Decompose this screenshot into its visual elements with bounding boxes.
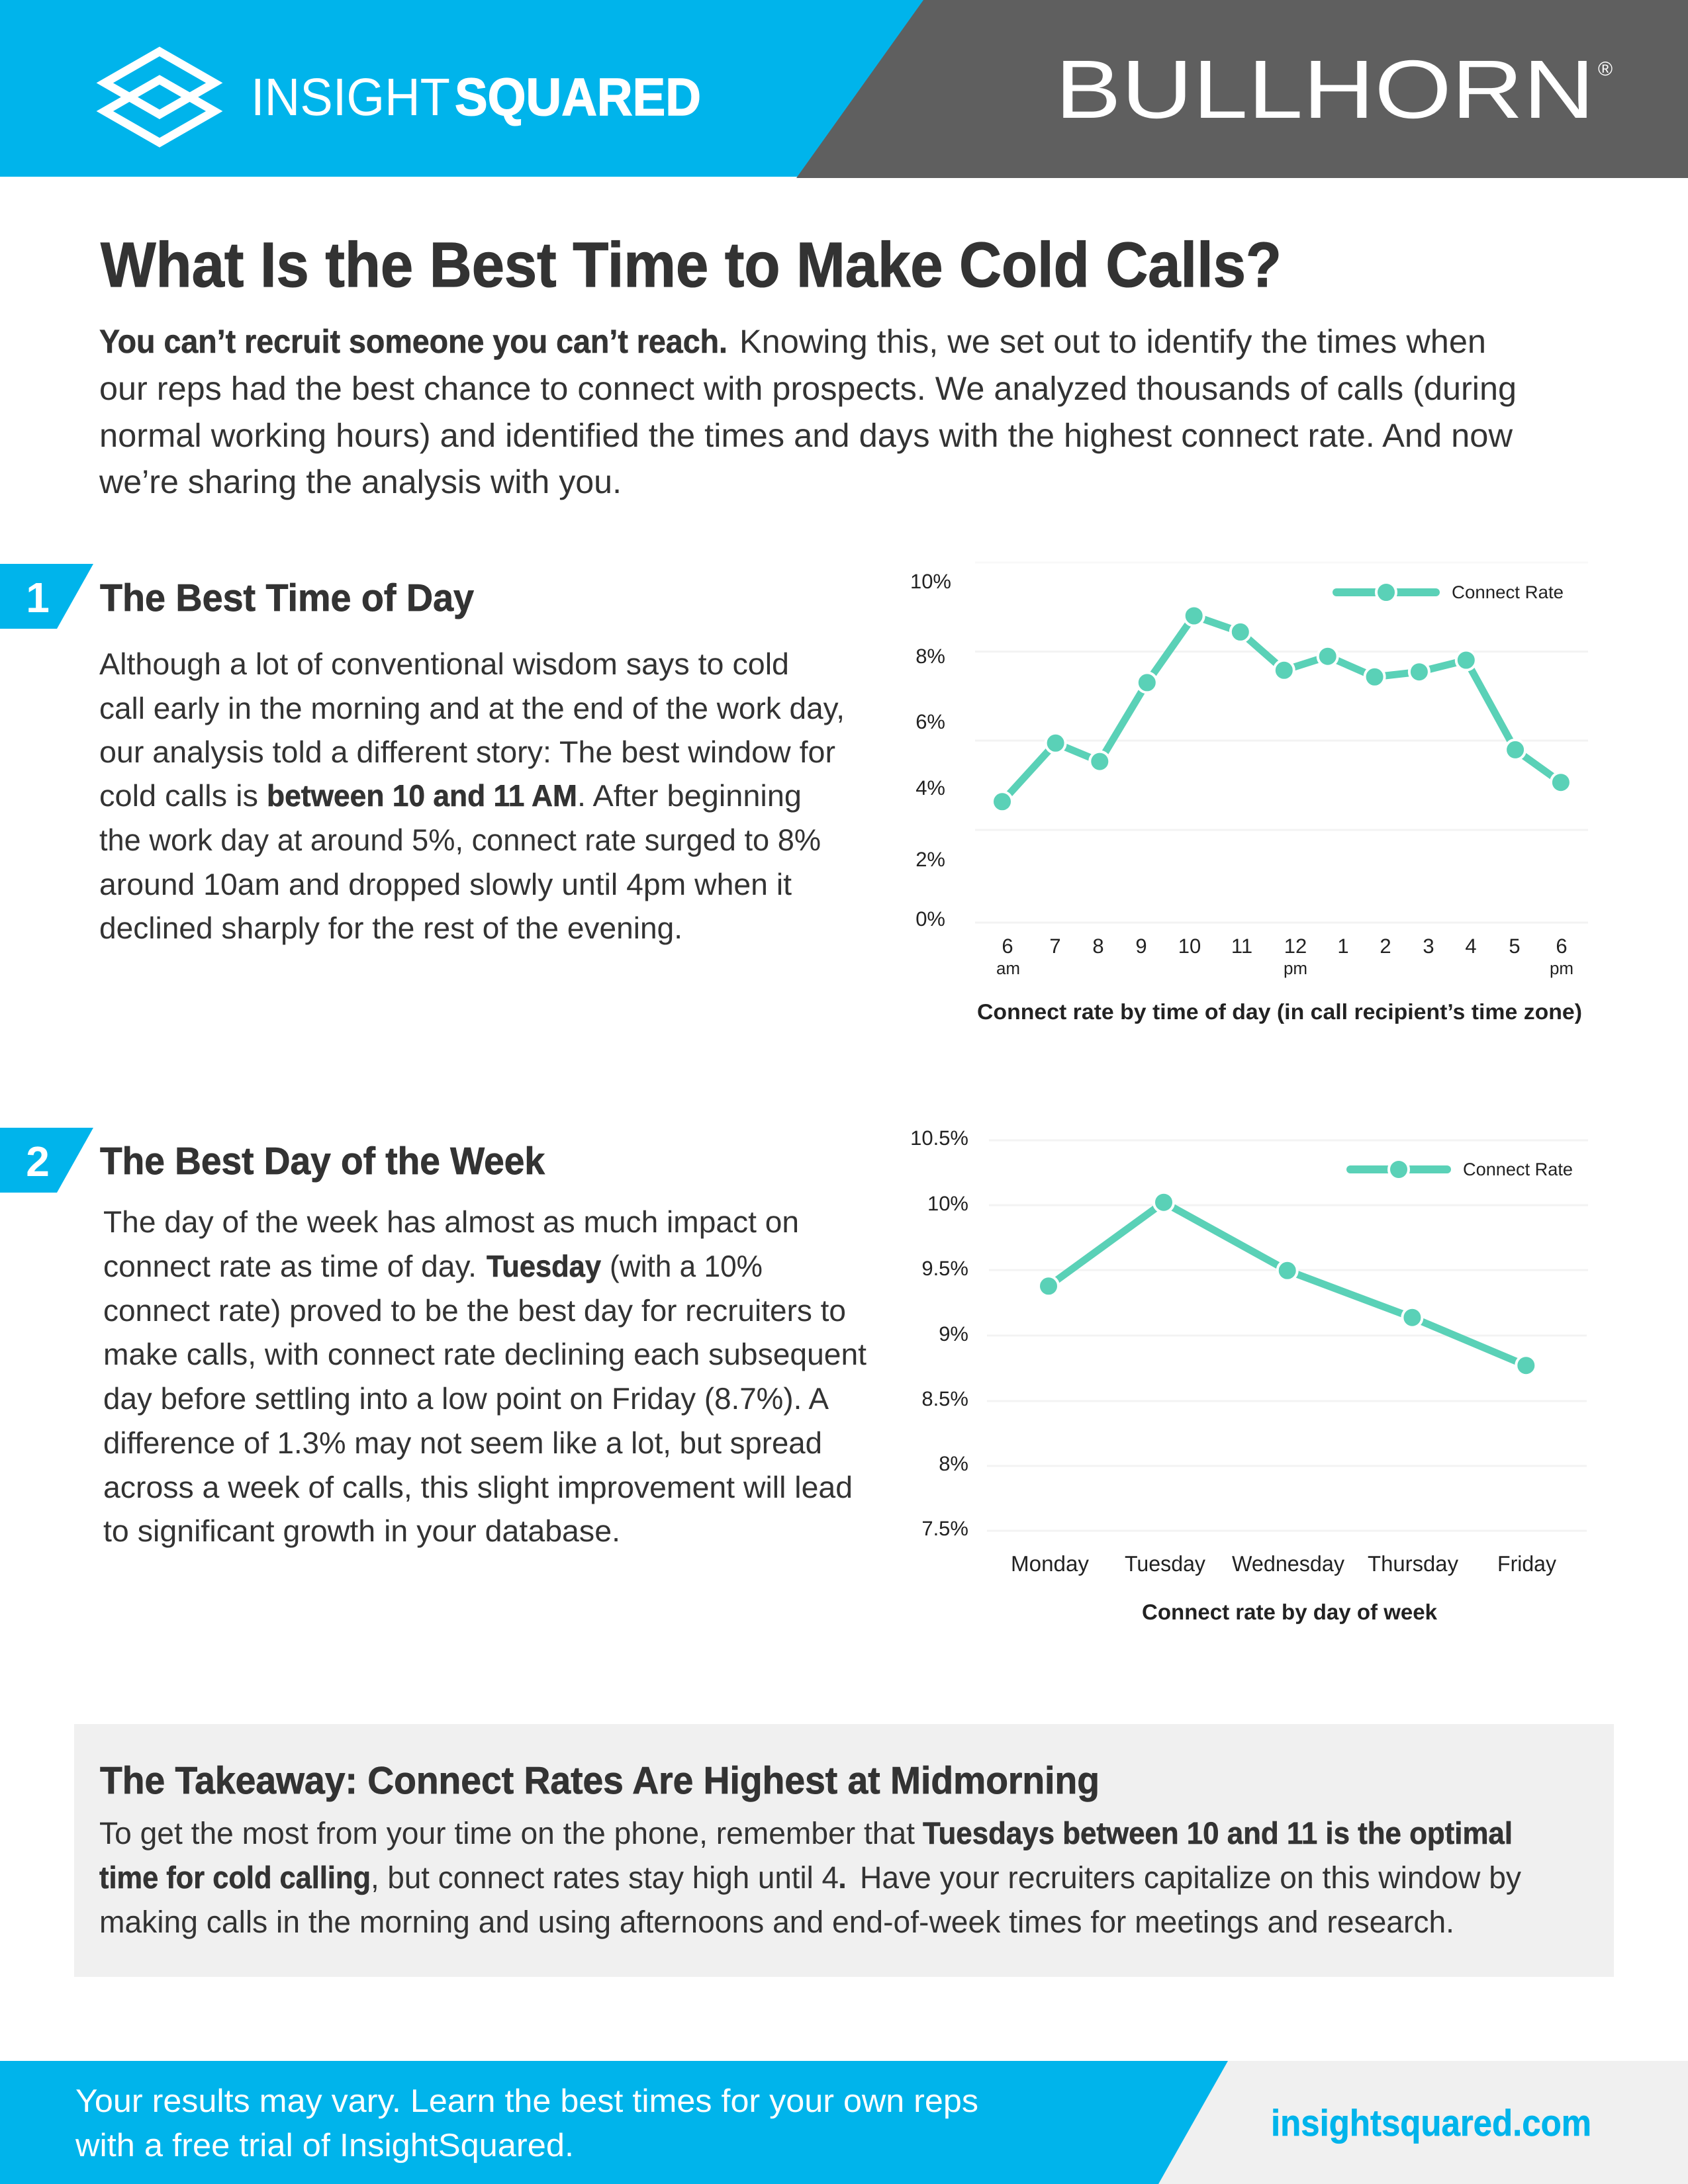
number badge 2 [0, 1128, 93, 1193]
body text: day of week: make calls, with connect rate declining each subsequent [103, 1337, 867, 1371]
heading: the best day of the week: The Best Day of the Week [100, 1140, 545, 1183]
body text: day of week: day before settling into a low point on Friday (8.7%). A [103, 1381, 829, 1416]
body text: time of day: cold calls is [99, 778, 258, 813]
x axis labels: 6 [1002, 934, 1013, 958]
chart caption: Connect rate by time of day (in call recipient’s time zone) [977, 999, 1582, 1024]
x axis labels: 7 [1049, 934, 1061, 958]
body text: day of week: connect rate as time of day. [103, 1249, 477, 1283]
y axis labels: 2% [915, 848, 945, 871]
y axis labels: 10% [927, 1192, 968, 1215]
body text: time of day: around 10am and dropped slowly until 4pm when it [99, 867, 792, 901]
line chart: connect rate by time of day [910, 563, 1588, 1024]
line chart: connect rate by day of week [910, 1126, 1588, 1624]
panel: takeaway [74, 1724, 1614, 1977]
x axis labels: pm [1550, 958, 1573, 978]
footer message [75, 2083, 978, 2163]
y axis labels: 8.5% [921, 1387, 968, 1410]
body text: time of day: Although a lot of conventional wisdom says to cold [99, 647, 789, 681]
intro text block: we’re sharing the analysis with you. [99, 463, 622, 500]
heading: takeaway: The Takeaway: Connect Rates Are Highest at Midmorning [100, 1759, 1100, 1802]
x axis labels [996, 934, 1573, 978]
x axis labels: 9 [1135, 934, 1147, 958]
Bullhorn wordmark: ® [1598, 58, 1613, 80]
body text: day of week: difference of 1.3% may not seem like a lot, but spread [103, 1426, 822, 1460]
data line [1049, 1203, 1526, 1365]
body text: day of week: Tuesday [487, 1249, 601, 1283]
takeaway body text: time for cold calling [99, 1860, 371, 1895]
y axis labels: 8% [939, 1452, 968, 1475]
legend [1336, 582, 1564, 602]
title: What Is the Best Time to Make Cold Calls? [101, 230, 1282, 300]
y axis labels: 10% [910, 570, 951, 593]
takeaway body text: Tuesdays between 10 and 11 is the optimal [923, 1815, 1513, 1850]
data points [992, 606, 1571, 811]
body text: day of week: (with a 10% [610, 1249, 763, 1283]
panel: best time of day [0, 563, 1588, 1024]
heading: the best time of day: The Best Time of Day [100, 576, 474, 619]
takeaway body text [99, 1815, 1521, 1939]
chart caption: Connect rate by day of week [1142, 1600, 1438, 1624]
intro text block: normal working hours) and identified the times and days with the highest connect rate. And now [99, 417, 1513, 454]
footer gray background [1125, 2061, 1688, 2184]
body text: day of week: connect rate) proved to be the best day for recruiters to [103, 1293, 846, 1328]
x axis labels: 12 [1284, 934, 1307, 958]
intro text block: Knowing this, we set out to identify the times when [739, 323, 1486, 360]
takeaway background [74, 1724, 1614, 1977]
body text: time of day: . After beginning [577, 778, 802, 813]
y axis labels: 7.5% [921, 1517, 968, 1540]
header background: blue [0, 0, 927, 177]
takeaway body text: , but connect rates stay high until 4 [371, 1860, 839, 1895]
x axis labels: pm [1284, 958, 1307, 978]
body text: time of day: the work day at around 5%, connect rate surged to 8% [99, 823, 821, 857]
footer message: with a free trial of InsightSquared. [75, 2128, 574, 2163]
InsightSquared wordmark: SQUARED [455, 68, 701, 126]
header band [0, 0, 1688, 178]
y axis labels: 6% [915, 710, 945, 733]
x axis labels: 2 [1380, 934, 1391, 958]
x axis labels: 11 [1231, 934, 1252, 958]
data line [1002, 615, 1561, 801]
y axis labels: 8% [915, 645, 945, 668]
x axis labels: Thursday [1368, 1551, 1458, 1576]
number badge 1 [0, 564, 93, 629]
header background: gray slant [796, 0, 1688, 178]
y axis labels [910, 1126, 968, 1540]
intro text block [99, 323, 1517, 500]
legend: Connect Rate [1452, 582, 1564, 602]
x axis labels: 6 [1556, 934, 1568, 958]
body text: day of week: across a week of calls, this slight improvement will lead [103, 1470, 853, 1504]
x axis labels: am [996, 958, 1020, 978]
x axis labels: Wednesday [1232, 1551, 1344, 1576]
x axis labels: Tuesday [1125, 1551, 1205, 1576]
x axis labels: 5 [1509, 934, 1521, 958]
body text: day of week: to significant growth in your database. [103, 1514, 620, 1548]
y axis labels: 10.5% [910, 1126, 968, 1150]
x axis labels: 3 [1423, 934, 1434, 958]
x axis labels: Friday [1497, 1551, 1556, 1576]
takeaway body text: . [838, 1860, 847, 1895]
body text: day of week [103, 1205, 867, 1548]
x axis labels: 10 [1178, 934, 1201, 958]
takeaway body text: Have your recruiters capitalize on this window by [860, 1860, 1521, 1895]
InsightSquared wordmark: INSIGHT [251, 68, 450, 126]
number badge 1: 1 [26, 574, 50, 621]
body text: day of week: The day of the week has almost as much impact on [103, 1205, 799, 1239]
x axis labels: 8 [1092, 934, 1104, 958]
Bullhorn wordmark: BULLHORN [1055, 44, 1595, 136]
takeaway body text: making calls in the morning and using afternoons and end-of-week times for meetings and research. [99, 1904, 1454, 1939]
footer band [0, 2061, 1688, 2184]
body text: time of day: our analysis told a different story: The best window for [99, 735, 835, 769]
panel: best day of the week [0, 1126, 1588, 1624]
takeaway body text: To get the most from your time on the phone, remember that [99, 1815, 915, 1850]
number badge 2: 2 [26, 1138, 50, 1185]
intro text block: You can’t recruit someone you can’t reach. [99, 323, 727, 360]
footer blue slant [0, 2061, 1228, 2184]
body text: time of day: between 10 and 11 AM [267, 778, 577, 813]
body text: time of day: declined sharply for the rest of the evening. [99, 911, 682, 945]
y axis labels: 4% [915, 776, 945, 799]
y axis labels: 0% [915, 907, 945, 931]
body text: time of day [99, 647, 845, 945]
y axis labels [910, 570, 951, 931]
y axis labels: 9.5% [921, 1257, 968, 1280]
legend: Connect Rate [1463, 1160, 1573, 1179]
x axis labels: 1 [1337, 934, 1349, 958]
x axis labels [1011, 1551, 1556, 1576]
x axis labels: Monday [1011, 1551, 1089, 1576]
legend [1350, 1160, 1573, 1179]
InsightSquared wordmark [251, 68, 701, 126]
data points [1039, 1193, 1536, 1375]
body text: time of day: call early in the morning and at the end of the work day, [99, 691, 845, 725]
y axis labels: 9% [939, 1322, 968, 1345]
footer message: Your results may vary. Learn the best times for your own reps [75, 2083, 978, 2119]
icon: InsightSquared diamond logo [105, 52, 214, 143]
x axis labels: 4 [1465, 934, 1477, 958]
footer website: insightsquared.com [1271, 2102, 1591, 2144]
intro text block: our reps had the best chance to connect with prospects. We analyzed thousands of calls (during [99, 370, 1517, 407]
